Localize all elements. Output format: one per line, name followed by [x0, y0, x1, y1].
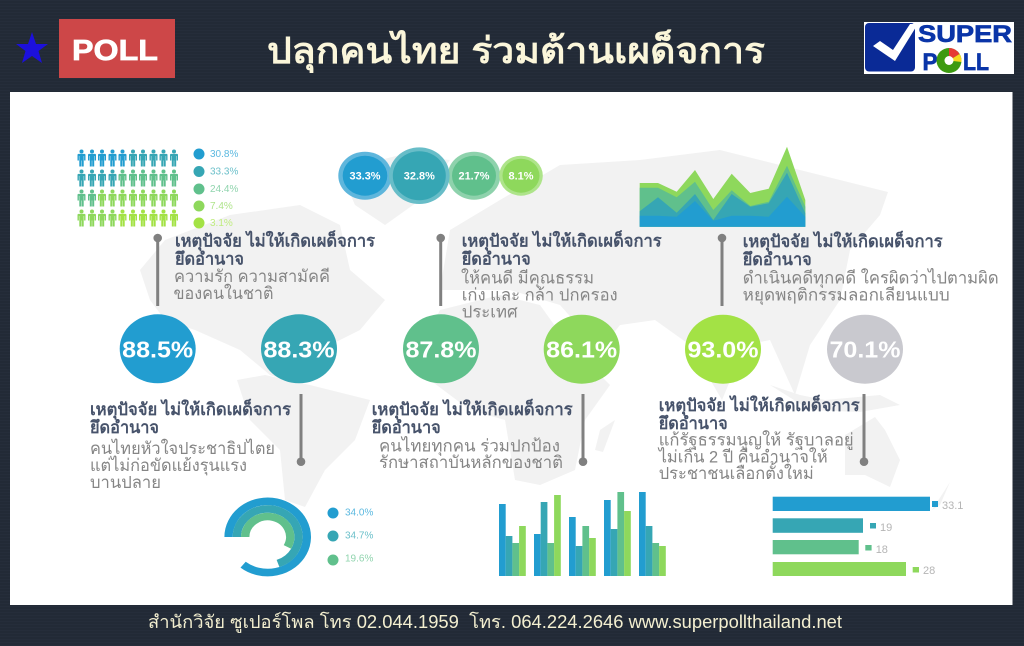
text block: top left: เหตุปัจจัย ไม่ให้เกิดเผด็จการ — [175, 228, 376, 252]
text block: bottom right: ยึดอำนาจ — [659, 414, 728, 433]
text block: top middle: เก่ง และ กล้า ปกครอง — [462, 286, 618, 304]
chart: radial donut — [229, 501, 307, 573]
stem: top middle — [436, 234, 445, 306]
text block: top middle: ให้คนดี มีคุณธรรม — [461, 268, 594, 288]
stat circle: 93.0%: 93.0% — [688, 337, 758, 363]
text block: bottom middle — [372, 397, 574, 472]
legend: people pictogram: 24.4% — [210, 184, 238, 195]
text block: top middle: ประเทศ — [462, 302, 518, 322]
text block: bottom right: ไม่เกิน 2 ปี คืนอำนาจให้ — [657, 446, 828, 466]
legend: people pictogram: 3.1% — [210, 218, 233, 229]
text block: top left: ยึดอำนาจ — [175, 250, 244, 268]
stat circle: 86.1%: 86.1% — [546, 337, 617, 363]
text block: top left — [174, 228, 376, 303]
text block: bottom middle: เหตุปัจจัย ไม่ให้เกิดเผด็จการ — [372, 397, 574, 420]
stem: bottom left — [297, 394, 305, 466]
stat circle: 70.1%: 70.1% — [830, 337, 900, 363]
chart: horizontal bars: 33.1 — [942, 500, 963, 512]
stat circle: 87.8%: 87.8% — [406, 337, 476, 363]
text block: bottom left — [90, 397, 292, 492]
text block: top right: หยุดพฤติกรรมลอกเลียนแบบ — [743, 286, 950, 306]
chart: horizontal bars: 18 — [876, 544, 888, 556]
text block: bottom middle: คนไทยทุกคน ร่วมปกป้อง — [379, 436, 560, 456]
text block: top middle — [461, 228, 663, 322]
chart: bubbles — [338, 147, 543, 204]
text block: bottom middle: รักษาสถาบันหลักของชาติ — [379, 453, 563, 472]
legend: donut: 19.6% — [345, 554, 373, 564]
poll badge — [59, 19, 175, 78]
chart: bubbles: 32.8% — [404, 170, 435, 182]
stat circle: 88.5% — [120, 314, 196, 383]
footer contact line: สำนักวิจัย ซูเปอร์โพล โทร 02.044.1959 โทร. 064.224.2646 www.superpollthailand.net — [148, 611, 842, 633]
text block: bottom left: คนไทยหัวใจประชาธิปไตย — [90, 438, 275, 458]
legend: people pictogram — [194, 148, 238, 229]
stat circle: 87.8% — [403, 314, 479, 383]
stat circle: 70.1% — [827, 315, 903, 384]
world map background — [140, 150, 950, 510]
icon: blue star — [16, 32, 48, 63]
text block: top right — [743, 229, 999, 306]
chart: horizontal bars: 28 — [923, 565, 935, 577]
logo: super poll — [864, 21, 1014, 76]
stat circle: 88.3%: 88.3% — [264, 337, 334, 363]
text block: top left: ของคนในชาติ — [174, 283, 274, 303]
stem: bottom middle — [579, 394, 587, 466]
chart: people pictogram — [78, 150, 178, 226]
text block: bottom left: แต่ไม่ก่อขัดแย้งรุนแรง — [90, 455, 247, 476]
legend: donut: 34.7% — [345, 530, 373, 542]
stat circle: 86.1% — [544, 315, 620, 384]
legend: people pictogram: 33.3% — [210, 166, 238, 178]
text block: top right: ดำเนินคดีทุกคดี ใครผิดว่าไปตามผิด — [743, 268, 999, 288]
chart: horizontal bars: 19 — [880, 522, 892, 534]
chart: bubbles: 33.3% — [350, 170, 381, 182]
chart: bubbles: 8.1% — [508, 170, 534, 182]
title: ปลุกคนไทย ร่วมต้านเผด็จการ — [267, 28, 766, 74]
chart: area — [640, 147, 805, 227]
legend: people pictogram: 30.8% — [210, 149, 238, 160]
logo: super poll: P — [922, 49, 938, 76]
text block: bottom right: แก้รัฐธรรมนูญให้ รัฐบาลอยู่ — [659, 430, 854, 450]
legend: donut — [328, 508, 373, 566]
stem: top left — [153, 234, 162, 306]
panel: white main panel — [10, 92, 1012, 605]
logo: super poll: SUPER — [918, 21, 1012, 48]
stem: bottom right — [860, 394, 868, 466]
text block: bottom right: ประชาชนเลือกตั้งใหม่ — [659, 461, 814, 483]
text block: bottom middle: ยึดอำนาจ — [372, 418, 441, 437]
text block: bottom left: บานปลาย — [90, 473, 161, 492]
legend: people pictogram: 7.4% — [210, 201, 233, 212]
stat circle: 93.0% — [685, 315, 761, 384]
text block: top left: ความรัก ความสามัคคี — [174, 267, 330, 286]
poll badge: POLL — [72, 35, 158, 67]
text block: bottom right: เหตุปัจจัย ไม่ให้เกิดเผด็จการ — [659, 393, 861, 416]
chart: grouped columns — [499, 492, 666, 576]
stat circle: 88.3% — [261, 314, 337, 383]
logo: super poll: LL — [963, 49, 989, 76]
text block: top right: เหตุปัจจัย ไม่ให้เกิดเผด็จการ — [743, 229, 944, 252]
chart: horizontal bars — [773, 497, 963, 577]
legend: donut: 34.0% — [345, 508, 373, 518]
text block: top middle: เหตุปัจจัย ไม่ให้เกิดเผด็จการ — [462, 228, 663, 252]
text block: bottom left: ยึดอำนาจ — [90, 418, 159, 437]
text block: bottom right — [657, 393, 861, 483]
chart: bubbles: 21.7% — [458, 170, 490, 182]
text block: top right: ยึดอำนาจ — [743, 250, 812, 269]
stem: top right — [718, 234, 726, 306]
text block: top middle: ยึดอำนาจ — [462, 250, 531, 268]
stat circle: 88.5%: 88.5% — [122, 337, 193, 363]
text block: bottom left: เหตุปัจจัย ไม่ให้เกิดเผด็จการ — [90, 397, 292, 420]
